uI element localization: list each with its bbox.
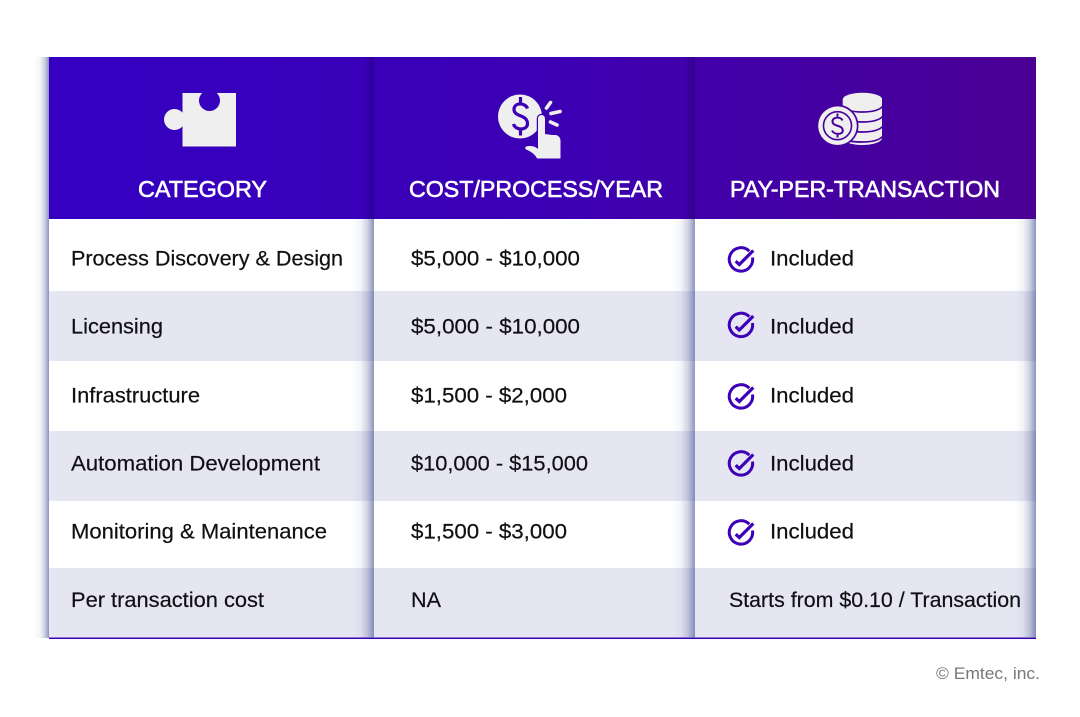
row: licensing [71, 313, 854, 338]
row: monitoring and maintenance: $1,500 - $3,000 [411, 520, 567, 544]
icon: puzzle piece [164, 93, 236, 146]
row: process discovery and design: Included [770, 248, 854, 270]
table [34, 57, 1036, 639]
icon: dollar coin with pointing hand [498, 94, 560, 158]
row: monitoring and maintenance [71, 520, 854, 544]
row: automation development: Automation Development [71, 452, 320, 476]
row: licensing: Included [770, 316, 854, 338]
row: per transaction cost: Per transaction cost [71, 589, 264, 612]
row: licensing: $5,000 - $10,000 [411, 316, 580, 338]
row: monitoring and maintenance: Included [770, 520, 854, 544]
column heading: category: CATEGORY [138, 176, 267, 202]
row: licensing: Licensing [71, 316, 163, 338]
row: automation development: $10,000 - $15,000 [411, 452, 588, 476]
row: per transaction cost: NA [411, 589, 441, 612]
row: process discovery and design: Process Discovery & Design [71, 248, 343, 270]
column shadows [34, 57, 1036, 638]
column heading: pay per transaction: PAY-PER-TRANSACTION [730, 176, 1000, 202]
row: infrastructure: Infrastructure [71, 384, 200, 408]
row: per transaction cost: Starts from $0.10 / Transaction [729, 589, 1021, 612]
column heading: cost per process per year: COST/PROCESS/YEAR [409, 176, 663, 202]
row: infrastructure: Included [770, 384, 854, 408]
row: process discovery and design [71, 248, 854, 271]
row: infrastructure: $1,500 - $2,000 [411, 384, 567, 408]
row: automation development [71, 452, 854, 476]
row: monitoring and maintenance: Monitoring & Maintenance [71, 520, 327, 544]
header band [49, 57, 1036, 219]
row: per transaction cost [71, 589, 1021, 612]
copyright note: © Emtec, inc. [936, 664, 1040, 683]
row: process discovery and design: $5,000 - $10,000 [411, 248, 580, 270]
icon: coin stack [816, 93, 882, 147]
row backgrounds [49, 219, 1036, 639]
row: infrastructure [71, 384, 854, 408]
row: automation development: Included [770, 452, 854, 476]
